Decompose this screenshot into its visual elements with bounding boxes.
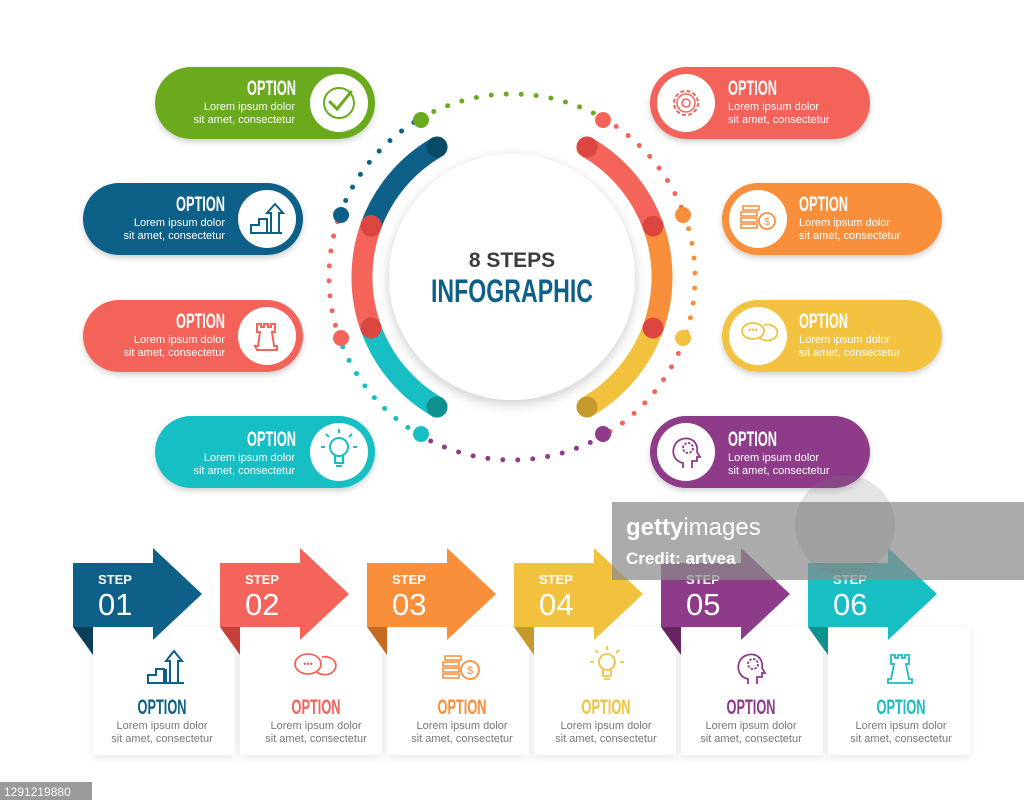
- step 04: sit amet, consectetur: [555, 733, 657, 745]
- step 01: [73, 548, 235, 755]
- step 06: OPTION: [876, 696, 926, 719]
- step 06: [808, 548, 970, 755]
- step 04: OPTION: [582, 696, 630, 719]
- pill: orange option: OPTION: [799, 193, 848, 216]
- pill: red option: sit amet, consectetur: [124, 347, 225, 359]
- watermark: Credit: artvea: [626, 549, 736, 568]
- step 03: [367, 548, 529, 755]
- pill: yellow option: OPTION: [799, 310, 848, 333]
- pill: purple option: OPTION: [728, 428, 777, 451]
- step 06: sit amet, consectetur: [850, 733, 952, 745]
- pill: blue option: [83, 183, 303, 255]
- thick colored arcs: [360, 136, 664, 418]
- pill: yellow option: Lorem ipsum dolor: [799, 334, 890, 346]
- pill: red right option: [650, 67, 870, 139]
- step 02: [220, 548, 382, 755]
- step 05: 05: [686, 587, 720, 622]
- step 03: Lorem ipsum dolor: [416, 720, 508, 732]
- step 04: STEP: [539, 572, 573, 587]
- pill: red option: [83, 300, 303, 372]
- step 03: sit amet, consectetur: [411, 733, 513, 745]
- pill: cyan option: sit amet, consectetur: [194, 465, 295, 477]
- step 01: Lorem ipsum dolor: [116, 720, 208, 732]
- step 01: sit amet, consectetur: [111, 733, 213, 745]
- center circle: [389, 154, 635, 400]
- step 06: Lorem ipsum dolor: [855, 720, 947, 732]
- image id: [0, 782, 92, 800]
- pill: green option: [155, 67, 375, 139]
- pill: blue option: Lorem ipsum dolor: [134, 217, 225, 229]
- pill: red right option: OPTION: [728, 77, 777, 100]
- step 06: STEP: [833, 572, 867, 587]
- pill: cyan option: OPTION: [247, 428, 296, 451]
- pill: purple option: [650, 416, 870, 488]
- pill: red option: Lorem ipsum dolor: [134, 334, 225, 346]
- pill: blue option: OPTION: [176, 193, 225, 216]
- pill: cyan option: [155, 416, 375, 488]
- pill: cyan option: Lorem ipsum dolor: [204, 452, 295, 464]
- center circle: INFOGRAPHIC: [431, 273, 593, 309]
- step 05: Lorem ipsum dolor: [705, 720, 797, 732]
- step 02: OPTION: [292, 696, 340, 719]
- step 02: sit amet, consectetur: [265, 733, 367, 745]
- step 01: OPTION: [138, 696, 186, 719]
- step 02: •••: [303, 659, 313, 669]
- step 04: Lorem ipsum dolor: [560, 720, 652, 732]
- pill: purple option: Lorem ipsum dolor: [728, 452, 819, 464]
- pill: orange option: [722, 183, 942, 255]
- pill: orange option: sit amet, consectetur: [799, 230, 901, 242]
- step 02: Lorem ipsum dolor: [270, 720, 362, 732]
- pill: orange option: $: [764, 217, 770, 228]
- dotted outer ring: [329, 94, 695, 460]
- pill: red right option: Lorem ipsum dolor: [728, 101, 819, 113]
- step 06: 06: [833, 587, 867, 622]
- pill: purple option: sit amet, consectetur: [728, 465, 830, 477]
- step 03: STEP: [392, 572, 426, 587]
- pill: yellow option: sit amet, consectetur: [799, 347, 901, 359]
- step 01: STEP: [98, 572, 132, 587]
- pill: green option: sit amet, consectetur: [194, 114, 295, 126]
- step 02: 02: [245, 587, 279, 622]
- step 02: STEP: [245, 572, 279, 587]
- pill: green option: Lorem ipsum dolor: [204, 101, 295, 113]
- step 03: 03: [392, 587, 426, 622]
- pill: yellow option: •••: [748, 325, 758, 335]
- watermark: gettyimages: [626, 514, 761, 541]
- image id: 1291219880: [4, 785, 71, 799]
- ring large dots: [333, 112, 691, 442]
- watermark: [612, 475, 1024, 580]
- step 01: 01: [98, 587, 132, 622]
- pill: orange option: Lorem ipsum dolor: [799, 217, 890, 229]
- pill: red option: OPTION: [176, 310, 225, 333]
- step 05: STEP: [686, 572, 720, 587]
- pill: blue option: sit amet, consectetur: [124, 230, 225, 242]
- step 03: $: [467, 665, 473, 677]
- step 04: [514, 548, 676, 755]
- step 05: OPTION: [726, 696, 776, 719]
- step 05: sit amet, consectetur: [700, 733, 802, 745]
- pill: green option: OPTION: [247, 77, 296, 100]
- pill: yellow option: [722, 300, 942, 372]
- center circle: 8 STEPS: [469, 249, 555, 272]
- pill: red right option: sit amet, consectetur: [728, 114, 830, 126]
- step 03: OPTION: [438, 696, 486, 719]
- step 05: [661, 548, 823, 755]
- step 04: 04: [539, 587, 573, 622]
